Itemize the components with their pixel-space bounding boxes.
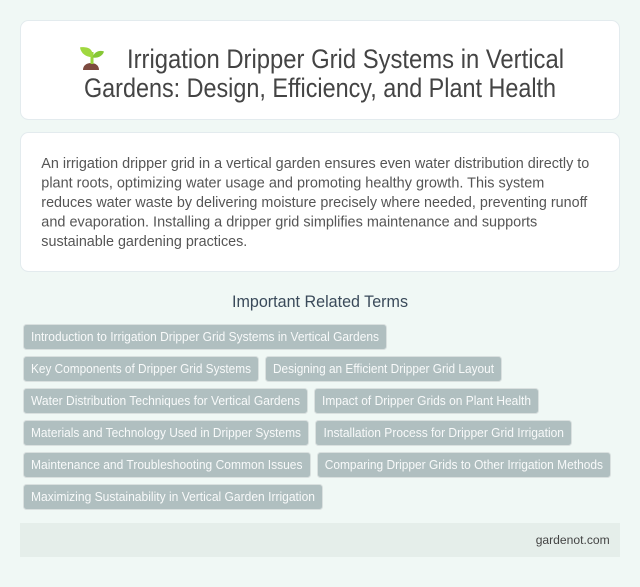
title text: Irrigation Dripper Grid Systems in Vertical [127, 44, 564, 74]
panel: description [20, 132, 620, 272]
description text: sustainable gardening practices. [41, 234, 247, 250]
title text [84, 44, 564, 103]
tag [318, 452, 610, 478]
tag: Key Components of Dripper Grid Systems [31, 362, 251, 376]
tag: Installation Process for Dripper Grid Irrigation [324, 426, 564, 440]
title panel [20, 20, 620, 120]
footer [20, 523, 620, 557]
description text: An irrigation dripper grid in a vertical garden ensures even water distribution directly to [41, 156, 589, 172]
related terms tags [24, 324, 610, 510]
tag [24, 388, 308, 414]
tag: Maintenance and Troubleshooting Common Issues [31, 458, 302, 472]
tag [266, 356, 502, 382]
tag: Materials and Technology Used in Dripper Systems [31, 426, 301, 440]
icon: seedling [80, 47, 104, 70]
tag [24, 452, 310, 478]
tag: Designing an Efficient Dripper Grid Layout [273, 362, 494, 376]
tag [316, 420, 572, 446]
tag [314, 388, 538, 414]
tag [24, 324, 386, 350]
tag: Impact of Dripper Grids on Plant Health [322, 394, 531, 408]
tag: Water Distribution Techniques for Vertical Gardens [31, 394, 300, 408]
tag: Maximizing Sustainability in Vertical Garden Irrigation [31, 490, 315, 504]
tag [24, 420, 308, 446]
title text: Gardens: Design, Efficiency, and Plant Health [84, 73, 556, 103]
tag [24, 356, 258, 382]
tag [24, 484, 322, 510]
description text: and evaporation. Installing a dripper grid simplifies maintenance and supports [41, 214, 537, 230]
footer source text: gardenot.com [536, 533, 610, 547]
tag: Introduction to Irrigation Dripper Grid Systems in Vertical Gardens [31, 330, 379, 344]
tag: Comparing Dripper Grids to Other Irrigation Methods [325, 458, 603, 472]
description text [41, 156, 589, 250]
description text: reduces water waste by delivering moisture precisely where needed, preventing runoff [41, 195, 588, 211]
heading: related terms: Important Related Terms [232, 293, 408, 311]
description text: plant roots, optimizing water usage and promoting healthy growth. This system [41, 176, 544, 192]
